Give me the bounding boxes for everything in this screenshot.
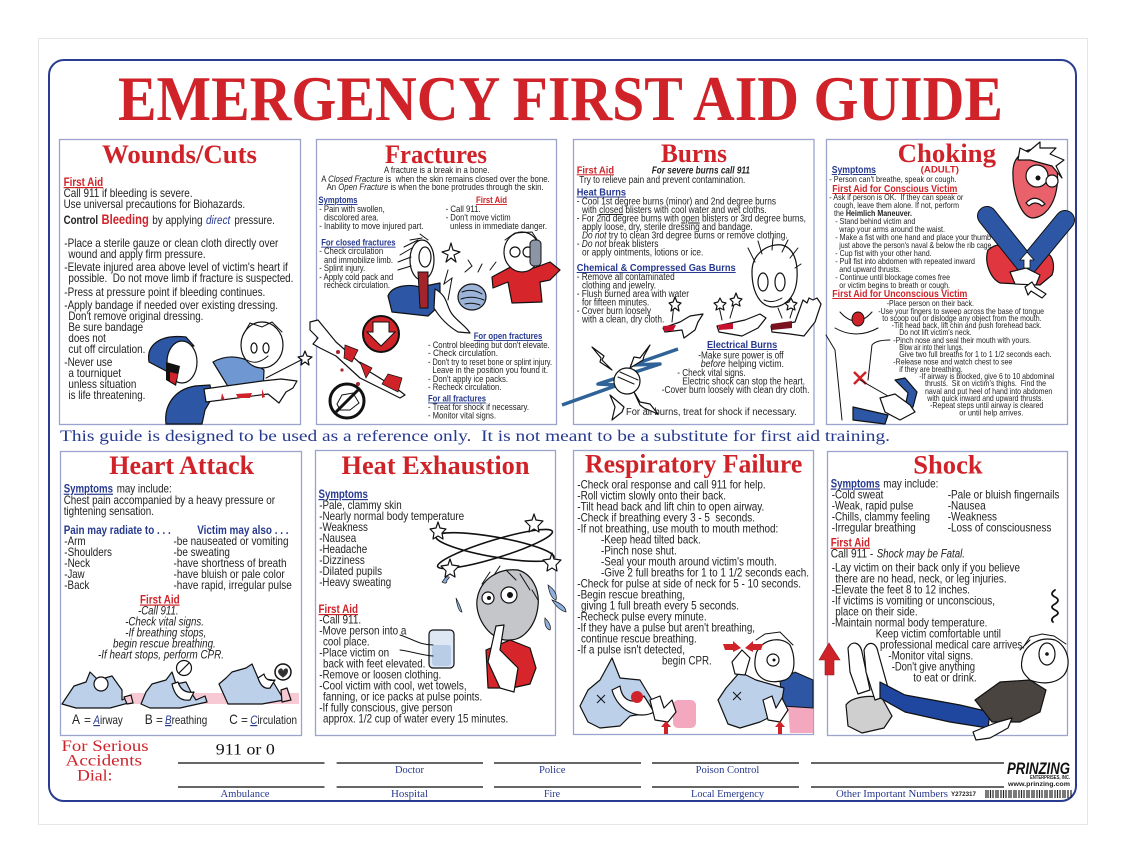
illustration: victim's open airway — [580, 658, 696, 734]
text: A = Airway — [72, 711, 123, 727]
text: respiratory steps: -Give 2 full breaths for 1 to 1 1/2 seconds each. — [601, 566, 809, 580]
text: wounds steps: -Apply bandage if needed over existing dressing. — [64, 298, 278, 312]
text: fracture first aid — [446, 195, 547, 231]
text: wounds steps: a tourniquet — [68, 366, 122, 380]
text: respiratory steps: -Recheck pulse every minute. — [577, 610, 707, 624]
barcode — [986, 790, 1071, 798]
text: open fractures — [428, 331, 552, 392]
text: shock symptoms — [831, 476, 1059, 534]
text: heat exhaustion symptoms: -Nausea — [319, 531, 357, 545]
heading: choking: Choking — [898, 139, 996, 168]
text: heart attack first aid: -If breathing stops, — [125, 626, 206, 640]
logo: Prinzing Enterprises: ENTERPRISES, INC. — [1030, 775, 1070, 781]
text: wounds first aid: First Aid — [64, 175, 103, 189]
text: C = Circulation — [229, 711, 297, 727]
text: unconscious victim steps: thrusts. Sit on victim's thighs. Find the — [925, 378, 1046, 388]
text: conscious victim steps: - Stand behind victim and — [835, 216, 916, 226]
text: fracture definition: A Closed Fracture is when the skin remains closed over the bone. — [321, 174, 550, 184]
text: heat burns — [577, 188, 806, 258]
text: respiratory steps: -If not breathing, use mouth to mouth method: — [577, 522, 778, 536]
text: heat exhaustion first aid: -Remove or loosen clothing. — [319, 668, 441, 682]
heading: heat exhaustion: Heat Exhaustion — [342, 451, 530, 480]
text: wounds steps: cut off circulation. — [68, 342, 145, 356]
text: heat exhaustion first aid: First Aid — [318, 602, 358, 616]
text: wounds first aid: by applying — [152, 213, 203, 227]
text: unconscious victim steps: naval and put heel of hand into abdomen — [925, 386, 1053, 396]
text: conscious victim steps — [829, 184, 993, 290]
text: heat burns: Heat Burns — [577, 188, 626, 198]
text: shock first aid: -If victims is vomiting or unconscious, — [832, 594, 995, 608]
text: conscious victim steps: - Make a fist with one hand and place your thumb — [835, 232, 991, 242]
text: unconscious victim steps: if they are breathing. — [899, 364, 963, 374]
text: respiratory steps: -If they have a pulse but aren't breathing, — [577, 621, 755, 635]
text: closed fractures: - Apply cold pack and — [319, 272, 393, 282]
illustration: injured man with leg fracture — [388, 234, 470, 333]
illustration: man bandaging boy's arm — [149, 322, 312, 424]
text: shock first aid: -Lay victim on their back only if you believe — [832, 561, 1020, 575]
text: respiratory steps: -Begin rescue breathing, — [577, 588, 685, 602]
text: wounds first aid: Call 911 if bleeding is severe. — [64, 186, 193, 200]
logo: Prinzing Enterprises: www.prinzing.com — [1007, 782, 1070, 788]
text: all fractures: - Treat for shock if necessary. — [428, 402, 529, 412]
text: shock symptoms: -Weakness — [948, 510, 997, 524]
text: conscious victim steps: wrap your arms around the waist. — [838, 224, 945, 234]
footer: phone number labels: Fire — [544, 789, 561, 800]
text: heat burns: - Cool 1st degree burns (minor) and 2nd degree burns — [577, 196, 776, 208]
heading: respiratory failure: Respiratory Failure — [585, 449, 802, 478]
text: heat exhaustion first aid: -Call 911. — [319, 613, 361, 627]
text: heart attack first aid: begin rescue breathing. — [113, 636, 216, 650]
footer: phone number labels: Doctor — [395, 765, 425, 776]
text: heat burns: apply loose, dry, sterile dressing and bandage. — [582, 222, 753, 233]
footer: phone number labels: Local Emergency — [691, 789, 764, 800]
text: fracture definition: An Open Fracture is when the bone protrudes through the skin. — [327, 182, 544, 192]
text: respiratory steps: -Keep head tilted back. — [601, 533, 701, 547]
text: unconscious victim steps: -Use your fingers to sweep across the base of tongue — [878, 306, 1044, 316]
text: closed fractures: - Check circulation — [319, 246, 383, 256]
text: chemical burns — [577, 263, 736, 326]
text: wounds first aid — [64, 175, 275, 227]
text: heat exhaustion first aid: -Cool victim with cool, wet towels, — [319, 679, 467, 693]
text: shock first aid: Keep victim comfortable until — [876, 627, 1001, 641]
text: burns first aid: For severe burns call 911 — [652, 165, 750, 176]
text: shock first aid: professional medical care arrives. — [880, 638, 1025, 652]
panel: heat exhaustion — [316, 450, 566, 736]
text: wounds first aid: pressure. — [234, 213, 275, 227]
heading: wounds/cuts: Wounds/Cuts — [102, 140, 257, 169]
text: shock first aid — [831, 536, 1025, 685]
icon: stop bleeding sign — [363, 316, 399, 352]
panel: respiratory failure — [574, 449, 814, 734]
illustration: electric shock hand — [562, 345, 678, 420]
text: wounds steps: -Never use — [64, 355, 113, 369]
text: wounds steps: does not — [68, 331, 106, 345]
text: fracture symptoms: - Pain with swollen, — [319, 204, 385, 214]
text: product code: Y272317 — [951, 791, 976, 798]
text: closed fractures — [319, 238, 396, 290]
text: open fractures: For open fractures — [474, 331, 542, 341]
text: heat exhaustion first aid: -Place victim on — [319, 646, 389, 660]
reference-only notice: This guide is designed to be used as a reference only. It is not meant to be a substitute for first aid training. — [60, 428, 890, 445]
text: chemical burns: with a clean, dry cloth. — [581, 314, 664, 326]
text: closed fractures: - Splint injury. — [319, 263, 365, 273]
text: shock first aid: First Aid — [831, 536, 870, 550]
text: chemical burns: Chemical & Compressed Gas Burns — [577, 263, 736, 274]
text: all fractures: - Monitor vital signs. — [428, 410, 496, 420]
text: conscious victim steps: and upward thrusts. — [839, 264, 901, 274]
text: fracture symptoms — [318, 195, 424, 231]
text: shock first aid: -Monitor vital signs. — [888, 649, 973, 663]
text: shock first aid: -Maintain normal body temperature. — [832, 616, 987, 630]
text: unconscious victim steps: Give two full breaths for 1 to 1 1/2 seconds each. — [899, 349, 1052, 359]
logo: Prinzing Enterprises — [1007, 759, 1070, 788]
poster frame — [49, 60, 1076, 801]
text: heat exhaustion symptoms: -Dilated pupils — [319, 564, 382, 578]
text: respiratory steps: -Seal your mouth around victim's mouth. — [601, 555, 777, 569]
text: wounds first aid: Control — [64, 213, 98, 227]
footer: phone number labels: Other Important Numbers — [836, 789, 948, 800]
text: B = Breathing: Breathing — [165, 713, 207, 727]
text: shock first aid: Call 911 - — [831, 547, 873, 561]
illustration: ice pack and person on phone — [458, 232, 560, 310]
title: EMERGENCY FIRST AID GUIDE — [118, 64, 1003, 134]
text: A = Airway: Airway — [93, 713, 123, 727]
text: heart attack first aid: -Call 911. — [138, 604, 179, 618]
text: heat exhaustion symptoms: -Weakness — [319, 520, 368, 534]
text: unconscious victim steps: to scoop out or dislodge any object from the mouth. — [882, 313, 1042, 323]
text: heart attack symptoms: may include: — [117, 482, 172, 496]
footer: for serious accidents dial: For Serious — [62, 738, 148, 755]
illustration: dizzy person with glass of water — [400, 514, 566, 692]
text: heat exhaustion symptoms: -Pale, clammy skin — [319, 498, 402, 512]
footer: phone number labels: Police — [539, 765, 566, 776]
text: chemical burns: clothing and jewelry. — [582, 280, 656, 292]
text: chemical burns: - Remove all contaminated — [577, 272, 675, 283]
text: fracture first aid: First Aid — [476, 195, 507, 205]
text: electrical burns: -Make sure power is off — [698, 350, 784, 362]
text: fracture symptoms: - Inability to move injured part. — [319, 221, 424, 231]
text: respiratory steps: -Pinch nose shut. — [601, 544, 677, 558]
footer: phone number labels — [220, 765, 948, 800]
text: conscious victim steps: or victim begins to breath or cough. — [839, 280, 950, 290]
text: shock symptoms: may include: — [883, 476, 938, 490]
panel: choking — [826, 139, 1068, 424]
text: burns first aid: First Aid — [577, 165, 614, 176]
footer: for serious accidents dial — [62, 738, 148, 785]
text: respiratory steps — [577, 478, 809, 668]
text: open fractures: - Control bleeding but don't elevate. — [428, 340, 550, 350]
text: heat exhaustion first aid — [318, 602, 508, 726]
text: heart attack symptoms: Chest pain accompanied by a heavy pressure or — [64, 493, 275, 507]
text: shock first aid: place on their side. — [835, 605, 918, 619]
panel: fractures — [310, 140, 560, 424]
illustration: choking person with Heimlich arms — [987, 142, 1065, 298]
text: heat exhaustion first aid: back with feet elevated. — [323, 657, 425, 671]
text: heart attack symptoms: tightening sensation. — [64, 504, 154, 518]
heading: heart attack: Heart Attack — [109, 451, 255, 480]
text: wounds steps — [64, 236, 293, 402]
text: chemical burns: for fifteen minutes. — [582, 298, 649, 308]
text: open fractures: - Recheck circulation. — [428, 382, 501, 392]
text: fracture first aid: - Call 911. — [446, 204, 481, 214]
text: all fractures — [428, 394, 529, 420]
text: respiratory steps: -If a pulse isn't detected, — [577, 643, 685, 657]
text: choking symptoms — [829, 165, 957, 184]
text: choking symptoms: - Person can't breathe, speak or cough. — [829, 174, 957, 184]
panel: wounds and cuts — [60, 140, 312, 424]
arrow: raise feet — [819, 643, 840, 675]
text: respiratory steps: -Roll victim slowly onto their back. — [577, 489, 726, 503]
footer: phone number labels: Ambulance — [220, 789, 270, 800]
text: heart attack first aid: First Aid — [140, 592, 180, 606]
text: electrical burns: -Cover burn loosely with clean dry cloth. — [662, 385, 809, 396]
text: adult label: (ADULT) — [921, 165, 959, 175]
text: C = Circulation: Circulation — [250, 713, 297, 727]
text: respiratory steps: begin CPR. — [662, 654, 712, 668]
heading: fractures: Fractures — [385, 140, 487, 169]
text: shock symptoms: -Pale or bluish fingernails — [948, 488, 1059, 502]
text: unconscious victim steps: -Release nose and watch chest to see — [893, 356, 1013, 366]
text: wounds steps: Be sure bandage — [68, 320, 143, 334]
text: heat burns: or apply ointments, lotions or ice. — [582, 248, 703, 258]
text: C = Circulation: C — [229, 711, 238, 727]
text: heat burns: - For 2nd degree burns with open blisters or 3rd degree burns, — [577, 214, 806, 224]
text: heat exhaustion symptoms — [318, 487, 465, 589]
text: unconscious victim steps: Blow air into their lungs. — [899, 342, 963, 352]
text: conscious victim steps: the Heimlich Maneuver. — [834, 208, 912, 218]
text: treat for shock note: For all burns, treat for shock if necessary. — [626, 407, 797, 418]
text: unconscious victim steps: First Aid for Unconscious Victim — [832, 289, 967, 300]
text: victim may also: -have bluish or pale color — [174, 567, 285, 581]
text: heat exhaustion symptoms: -Headache — [319, 542, 368, 556]
footer: for serious accidents dial: Accidents — [66, 752, 142, 770]
text: heat exhaustion symptoms: -Dizziness — [319, 553, 365, 567]
text: shock symptoms: Symptoms — [831, 476, 880, 490]
text: victim may also: -be sweating — [174, 545, 230, 559]
text: burns first aid: Try to relieve pain and prevent contamination. — [579, 175, 745, 186]
text: unconscious victim steps: -Tilt head back, lift chin and push forehead back. — [892, 320, 1042, 330]
text: fracture first aid: - Don't move victim — [446, 212, 511, 222]
text: C = Circulation: = — [241, 713, 248, 727]
text: wounds first aid: Use universal precautions for Biohazards. — [64, 197, 245, 211]
text: closed fractures: and immobilize limb. — [324, 255, 393, 265]
text: heart attack symptoms: Symptoms — [64, 482, 113, 496]
footer: phone number labels: Hospital — [391, 789, 428, 800]
text: wounds steps: is life threatening. — [68, 388, 145, 402]
text: A = Airway: A — [72, 711, 81, 727]
text: choking symptoms: Symptoms — [832, 165, 876, 176]
text: open fractures: - Check circulation. — [428, 348, 498, 358]
text: electrical burns: before helping victim. — [701, 359, 784, 370]
text: unconscious victim steps: or until help arrives. — [959, 408, 1023, 418]
text: wounds steps: -Elevate injured area above level of victim's heart if — [64, 260, 288, 274]
text: heat exhaustion first aid: fanning, or ice packs at pulse points. — [323, 690, 482, 704]
text: respiratory steps: continue rescue breathing. — [581, 632, 697, 646]
text: heat burns: - Do not break blisters — [577, 239, 658, 250]
text: conscious victim steps: cough, leave them alone. If not, perform — [834, 200, 959, 210]
panel: shock — [819, 450, 1068, 740]
text: respiratory steps: -Check for pulse at side of neck for 5 - 10 seconds. — [577, 577, 801, 591]
text: heart attack first aid: -Check vital signs. — [125, 614, 204, 628]
illustration: rescue on unconscious victim — [826, 312, 917, 424]
text: fracture symptoms: Symptoms — [318, 195, 358, 205]
text: pain may radiate: -Neck — [64, 556, 90, 570]
text: unconscious victim steps: -Pinch nose and seal their mouth with yours. — [893, 335, 1031, 345]
text: open fractures: - Don't apply ice packs. — [428, 374, 508, 384]
text: wounds first aid: direct — [206, 213, 231, 227]
text: victim may also — [174, 523, 292, 592]
text: unconscious victim steps: -Place person on their back. — [887, 298, 974, 308]
text: victim may also: -be nauseated or vomiting — [174, 534, 288, 548]
text: heat exhaustion symptoms: -Heavy sweating — [319, 575, 391, 589]
text: fracture first aid: unless in immediate danger. — [450, 221, 547, 231]
text: pain may radiate: -Back — [64, 578, 89, 592]
text: B = Breathing: B — [145, 711, 153, 727]
logo: Prinzing Enterprises: PRINZING — [1007, 759, 1070, 778]
text: fracture definition — [321, 165, 550, 192]
text: respiratory steps: giving 1 full breath every 5 seconds. — [581, 599, 739, 613]
text: burns first aid — [577, 165, 750, 186]
text: heat exhaustion first aid: -Move person into a — [319, 624, 407, 638]
text: conscious victim steps: - Ask if person is OK. If they can speak or — [829, 192, 964, 202]
text: shock first aid: -Elevate the feet 8 to 12 inches. — [832, 583, 970, 597]
text: electrical burns: Electrical Burns — [707, 340, 778, 351]
text: shock first aid: -Don't give anything — [892, 660, 975, 674]
text: 911 or 0: 911 or 0 — [216, 742, 275, 759]
text: respiratory steps: -Check oral response and call 911 for help. — [577, 478, 766, 492]
text: closed fractures: For closed fractures — [321, 238, 396, 248]
text: electrical burns: Electric shock can stop the heart. — [682, 376, 805, 388]
text: shock first aid: Shock may be Fatal. — [877, 547, 965, 561]
illustration: rescuer giving breaths — [718, 632, 813, 734]
text: chemical burns: - Cover burn loosely — [577, 306, 651, 317]
text: victim may also: -have shortness of breath — [174, 556, 286, 570]
text: shock symptoms: -Nausea — [948, 498, 986, 512]
text: wounds steps: possible. Do not move limb if fracture is suspected. — [68, 271, 293, 285]
text: heat exhaustion first aid: approx. 1/2 cup of water every 15 minutes. — [323, 712, 508, 726]
text: conscious victim steps: just above the person's naval & below the rib cage. — [838, 240, 993, 250]
footer: phone number labels: Poison Control — [696, 765, 760, 776]
text: wounds steps: -Place a sterile gauze or clean cloth directly over — [64, 236, 278, 250]
text: victim may also: -have rapid, irregular pulse — [174, 578, 292, 592]
text: pain may radiate — [64, 523, 171, 592]
text: wounds steps: unless situation — [68, 377, 136, 391]
text: shock symptoms: -Cold sweat — [832, 488, 884, 502]
text: chemical burns: - Flush burned area with water — [577, 289, 690, 300]
text: A = Airway: = — [84, 713, 91, 727]
text: heat exhaustion first aid: cool place. — [323, 635, 370, 649]
text: shock symptoms: -Irregular breathing — [832, 520, 916, 534]
text: heart attack symptoms — [64, 482, 275, 518]
text: fracture symptoms: discolored area. — [324, 212, 379, 222]
text: heart attack first aid — [98, 592, 224, 662]
illustration: open fracture arm — [310, 320, 405, 398]
icon: no ice sign — [330, 384, 364, 418]
text: electrical burns: - Check vital signs. — [677, 368, 746, 379]
text: wounds steps: -Press at pressure point if bleeding continues. — [64, 285, 265, 299]
text: conscious victim steps: - Continue until blockage comes free — [835, 272, 950, 282]
text: open fractures: - Don't try to reset bone or splint injury. — [428, 357, 552, 367]
text: unconscious victim steps: -Repeat steps until airway is cleared — [930, 400, 1044, 410]
illustration: ABC rescue figures — [62, 660, 299, 708]
text: electrical burns — [662, 340, 809, 396]
text: shock symptoms: -Chills, clammy feeling — [832, 510, 930, 524]
text: closed fractures: recheck circulation. — [324, 280, 390, 290]
text: heat burns: Do not try to clean 3rd degree burns or remove clothing. — [582, 230, 788, 242]
text: open fractures: Leave in the position you found it. — [432, 365, 548, 375]
text: shock first aid: there are no head, neck, or leg injuries. — [835, 572, 1007, 586]
text: heat exhaustion symptoms: Symptoms — [318, 487, 368, 501]
text: heart attack first aid: -If heart stops, perform CPR. — [98, 648, 224, 662]
text: B = Breathing: = — [156, 713, 163, 727]
text: all fractures: For all fractures — [428, 394, 486, 404]
text: pain may radiate: -Shoulders — [64, 545, 112, 559]
text: pain may radiate: -Arm — [64, 534, 86, 548]
text: conscious victim steps: - Pull fist into abdomen with repeated inward — [835, 256, 975, 266]
heading: shock: Shock — [913, 450, 983, 479]
text: shock first aid: to eat or drink. — [913, 671, 977, 685]
text: respiratory steps: -Tilt head back and lift chin to open airway. — [577, 500, 764, 514]
illustration: boy's face — [748, 238, 801, 307]
illustration: person lying with feet elevated — [846, 590, 1068, 740]
text: unconscious victim steps: -If airway is blocked, give 6 to 10 abdominal — [919, 371, 1054, 381]
panel: heart attack — [60, 451, 302, 736]
text: pain may radiate: -Jaw — [64, 567, 85, 581]
text: unconscious victim steps: with quick inward and upward thrusts. — [926, 393, 1043, 403]
illustration: burned hands and stars — [663, 293, 821, 338]
text: shock symptoms: -Weak, rapid pulse — [832, 498, 914, 512]
text: conscious victim steps: First Aid for Conscious Victim — [832, 184, 957, 195]
text: pain may radiate: Pain may radiate to . . . — [64, 523, 171, 537]
text: victim may also: Victim may also . . . — [197, 523, 288, 537]
text: heat exhaustion first aid: -If fully conscious, give person — [319, 701, 452, 715]
text: shock symptoms: -Loss of consciousness — [948, 520, 1051, 534]
footer: phone number lines — [178, 763, 1004, 787]
text: heat burns: with closed blisters with cool water and wet cloths. — [581, 205, 767, 216]
text: B = Breathing — [145, 711, 207, 727]
text: heat exhaustion symptoms: -Nearly normal body temperature — [319, 509, 465, 523]
heading: burns: Burns — [661, 139, 727, 168]
text: fracture definition: A fracture is a break in a bone. — [384, 165, 490, 175]
text: wounds steps: Don't remove original dressing. — [68, 309, 203, 323]
text: unconscious victim steps — [832, 289, 1054, 418]
text: wounds first aid: Bleeding — [102, 211, 149, 227]
panel: burns — [562, 139, 821, 424]
text: unconscious victim steps: Do not lift victim's neck. — [899, 327, 972, 337]
footer: for serious accidents dial: Dial: — [77, 768, 112, 785]
text: respiratory steps: -Check if breathing every 3 - 5 seconds. — [577, 511, 755, 525]
text: wounds steps: wound and apply firm pressure. — [68, 247, 206, 261]
text: conscious victim steps: - Cup fist with your other hand. — [835, 248, 932, 258]
